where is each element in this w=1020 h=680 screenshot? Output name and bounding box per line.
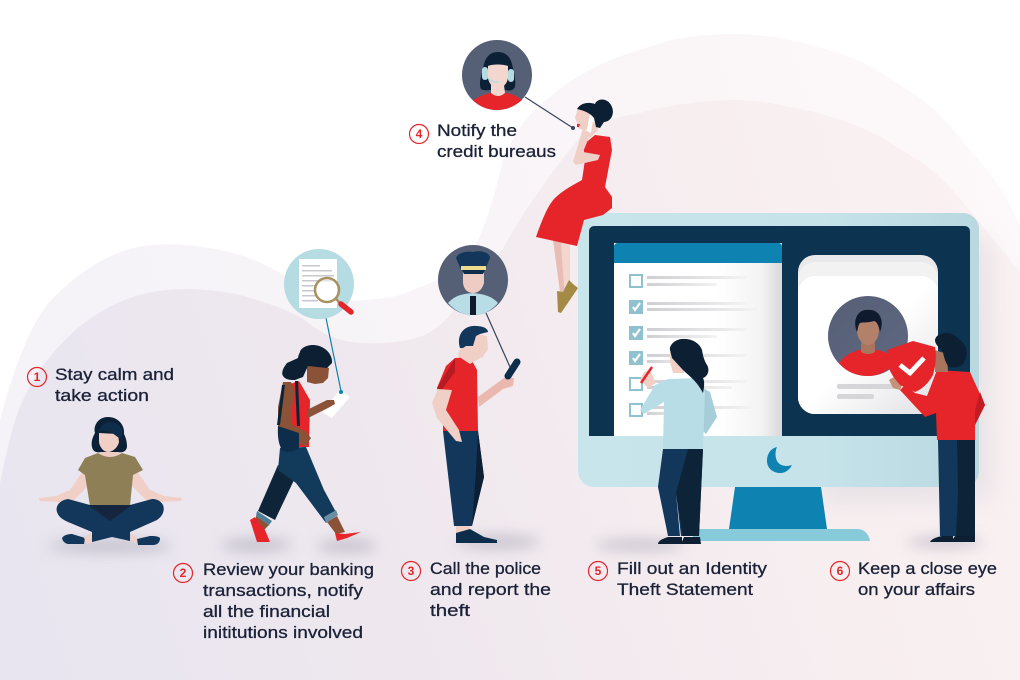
monitor base	[690, 529, 870, 541]
left arm	[432, 389, 462, 442]
fringe	[98, 422, 123, 439]
figure 1: calm woman	[39, 417, 182, 545]
cap visor	[462, 270, 485, 274]
step 3 label: 3	[408, 564, 415, 578]
shield check	[900, 358, 924, 373]
step 1 label: 1	[34, 370, 41, 384]
neck	[584, 118, 598, 138]
step 5 label: Theft Statement	[617, 580, 753, 599]
figure 6: man with shield	[887, 333, 985, 542]
front cuff	[324, 510, 338, 523]
hair back	[92, 417, 127, 452]
profile text lines	[837, 384, 897, 389]
document lines	[302, 265, 334, 302]
right foot	[137, 536, 160, 545]
magnifier lens	[315, 278, 339, 302]
monitor logo	[767, 447, 792, 473]
lips	[577, 124, 580, 127]
checklist text lines	[647, 276, 757, 415]
magnifier handle	[336, 299, 341, 304]
ankles	[84, 533, 92, 544]
legs	[57, 499, 164, 542]
right arm	[478, 378, 514, 407]
step 4 label: credit bureaus	[437, 142, 556, 161]
step 2 label: transactions, notify	[203, 581, 364, 600]
arm to receipt	[307, 400, 335, 418]
step 1 label: Stay calm and	[55, 365, 174, 384]
shirt	[437, 357, 478, 431]
cap	[456, 251, 490, 270]
step 2 label: 2	[180, 566, 187, 580]
shoes	[930, 536, 953, 542]
monitor glow	[820, 240, 990, 500]
step 3 label: theft	[430, 601, 470, 620]
figure 5: woman filling statement	[640, 339, 717, 544]
face	[488, 64, 508, 88]
back cuff	[256, 511, 272, 525]
shoes	[658, 537, 682, 544]
dress	[536, 135, 612, 246]
monitor screen	[589, 226, 970, 436]
callout line	[486, 313, 510, 367]
left foot	[62, 534, 85, 544]
back arm	[278, 382, 311, 447]
step 5 label: Fill out an Identity	[617, 559, 768, 578]
document icon	[299, 259, 337, 308]
neck	[100, 445, 120, 458]
step 2 label: Review your banking	[203, 560, 374, 579]
legs	[553, 240, 570, 292]
hair	[282, 345, 332, 380]
neck	[458, 340, 482, 364]
legs	[938, 440, 975, 536]
hair	[577, 99, 613, 128]
panel: checklist document	[614, 243, 782, 436]
checkboxes	[630, 275, 642, 416]
trousers	[443, 431, 484, 526]
arms	[39, 471, 91, 502]
monitor	[578, 213, 990, 541]
figure 2: walking woman	[250, 345, 361, 542]
step 4 label: 4	[416, 127, 423, 141]
red shirt	[900, 370, 985, 440]
step 5 label	[588, 559, 768, 599]
neck and face	[307, 363, 329, 384]
step 3 label: Call the police	[430, 559, 541, 578]
hair	[935, 333, 967, 367]
step 3 label: and report the	[430, 580, 551, 599]
tie	[470, 296, 476, 315]
dark lap	[88, 505, 132, 521]
red top	[284, 381, 310, 447]
monitor body	[578, 213, 979, 487]
step 1 label: take action	[55, 386, 149, 405]
hair	[480, 52, 515, 91]
pen	[641, 367, 652, 383]
shoes	[557, 280, 578, 313]
step 6 label: on your affairs	[858, 580, 975, 599]
phone	[585, 116, 593, 133]
front shoe	[335, 532, 361, 541]
near arm and torso	[640, 378, 705, 449]
face	[463, 270, 484, 293]
document header	[614, 243, 782, 263]
step 6 label: 6	[837, 564, 844, 578]
hair	[670, 339, 708, 393]
check marks	[633, 303, 640, 361]
face	[470, 333, 488, 358]
shoulders	[448, 293, 498, 315]
step 6 label: Keep a close eye	[858, 559, 997, 578]
hair	[459, 326, 488, 348]
step 4 label	[410, 121, 556, 161]
receipt	[322, 390, 350, 418]
neck	[491, 85, 505, 96]
arm	[573, 128, 600, 165]
monitor stand	[729, 487, 827, 529]
step 5 label: 5	[595, 564, 602, 578]
callout: police	[438, 245, 510, 367]
face	[935, 350, 948, 372]
left strap	[277, 385, 285, 425]
figure 4: woman on the phone	[536, 99, 613, 313]
profile avatar	[828, 296, 908, 376]
hand	[889, 375, 903, 390]
right strap	[295, 381, 300, 426]
callout: credit bureaus	[462, 40, 575, 130]
callout circle	[462, 40, 532, 110]
back shoe	[250, 517, 270, 542]
back leg	[258, 465, 294, 520]
ground shadows	[48, 536, 983, 552]
shirt	[78, 453, 143, 506]
phone	[508, 362, 517, 376]
cap band	[461, 266, 486, 270]
shoe	[456, 529, 497, 543]
front leg	[278, 447, 337, 523]
face	[670, 352, 684, 373]
shoulders	[473, 93, 522, 110]
panel: profile card	[798, 255, 938, 414]
step 4 label: Notify the	[437, 121, 517, 140]
front foot	[327, 516, 345, 534]
step 6 label	[830, 559, 997, 599]
legs	[658, 449, 703, 536]
callout circle	[284, 249, 354, 319]
ankle	[456, 526, 470, 535]
shield	[887, 341, 936, 392]
bag	[278, 426, 299, 452]
step 2 label	[174, 560, 374, 642]
figure 3: man with phone	[432, 326, 517, 543]
far arm	[703, 388, 717, 434]
callout: document review	[284, 249, 354, 394]
step 2 label: inititutions involved	[203, 623, 363, 642]
step 1 label	[28, 365, 174, 405]
step 3 label	[402, 559, 551, 620]
hand	[640, 370, 656, 388]
headset	[482, 67, 488, 80]
shirt shade	[975, 392, 985, 425]
step 2 label: all the financial	[203, 602, 330, 621]
callout line	[326, 318, 341, 391]
face	[99, 433, 119, 452]
callout circle	[438, 245, 508, 315]
callout line	[525, 97, 573, 128]
face	[575, 108, 590, 130]
